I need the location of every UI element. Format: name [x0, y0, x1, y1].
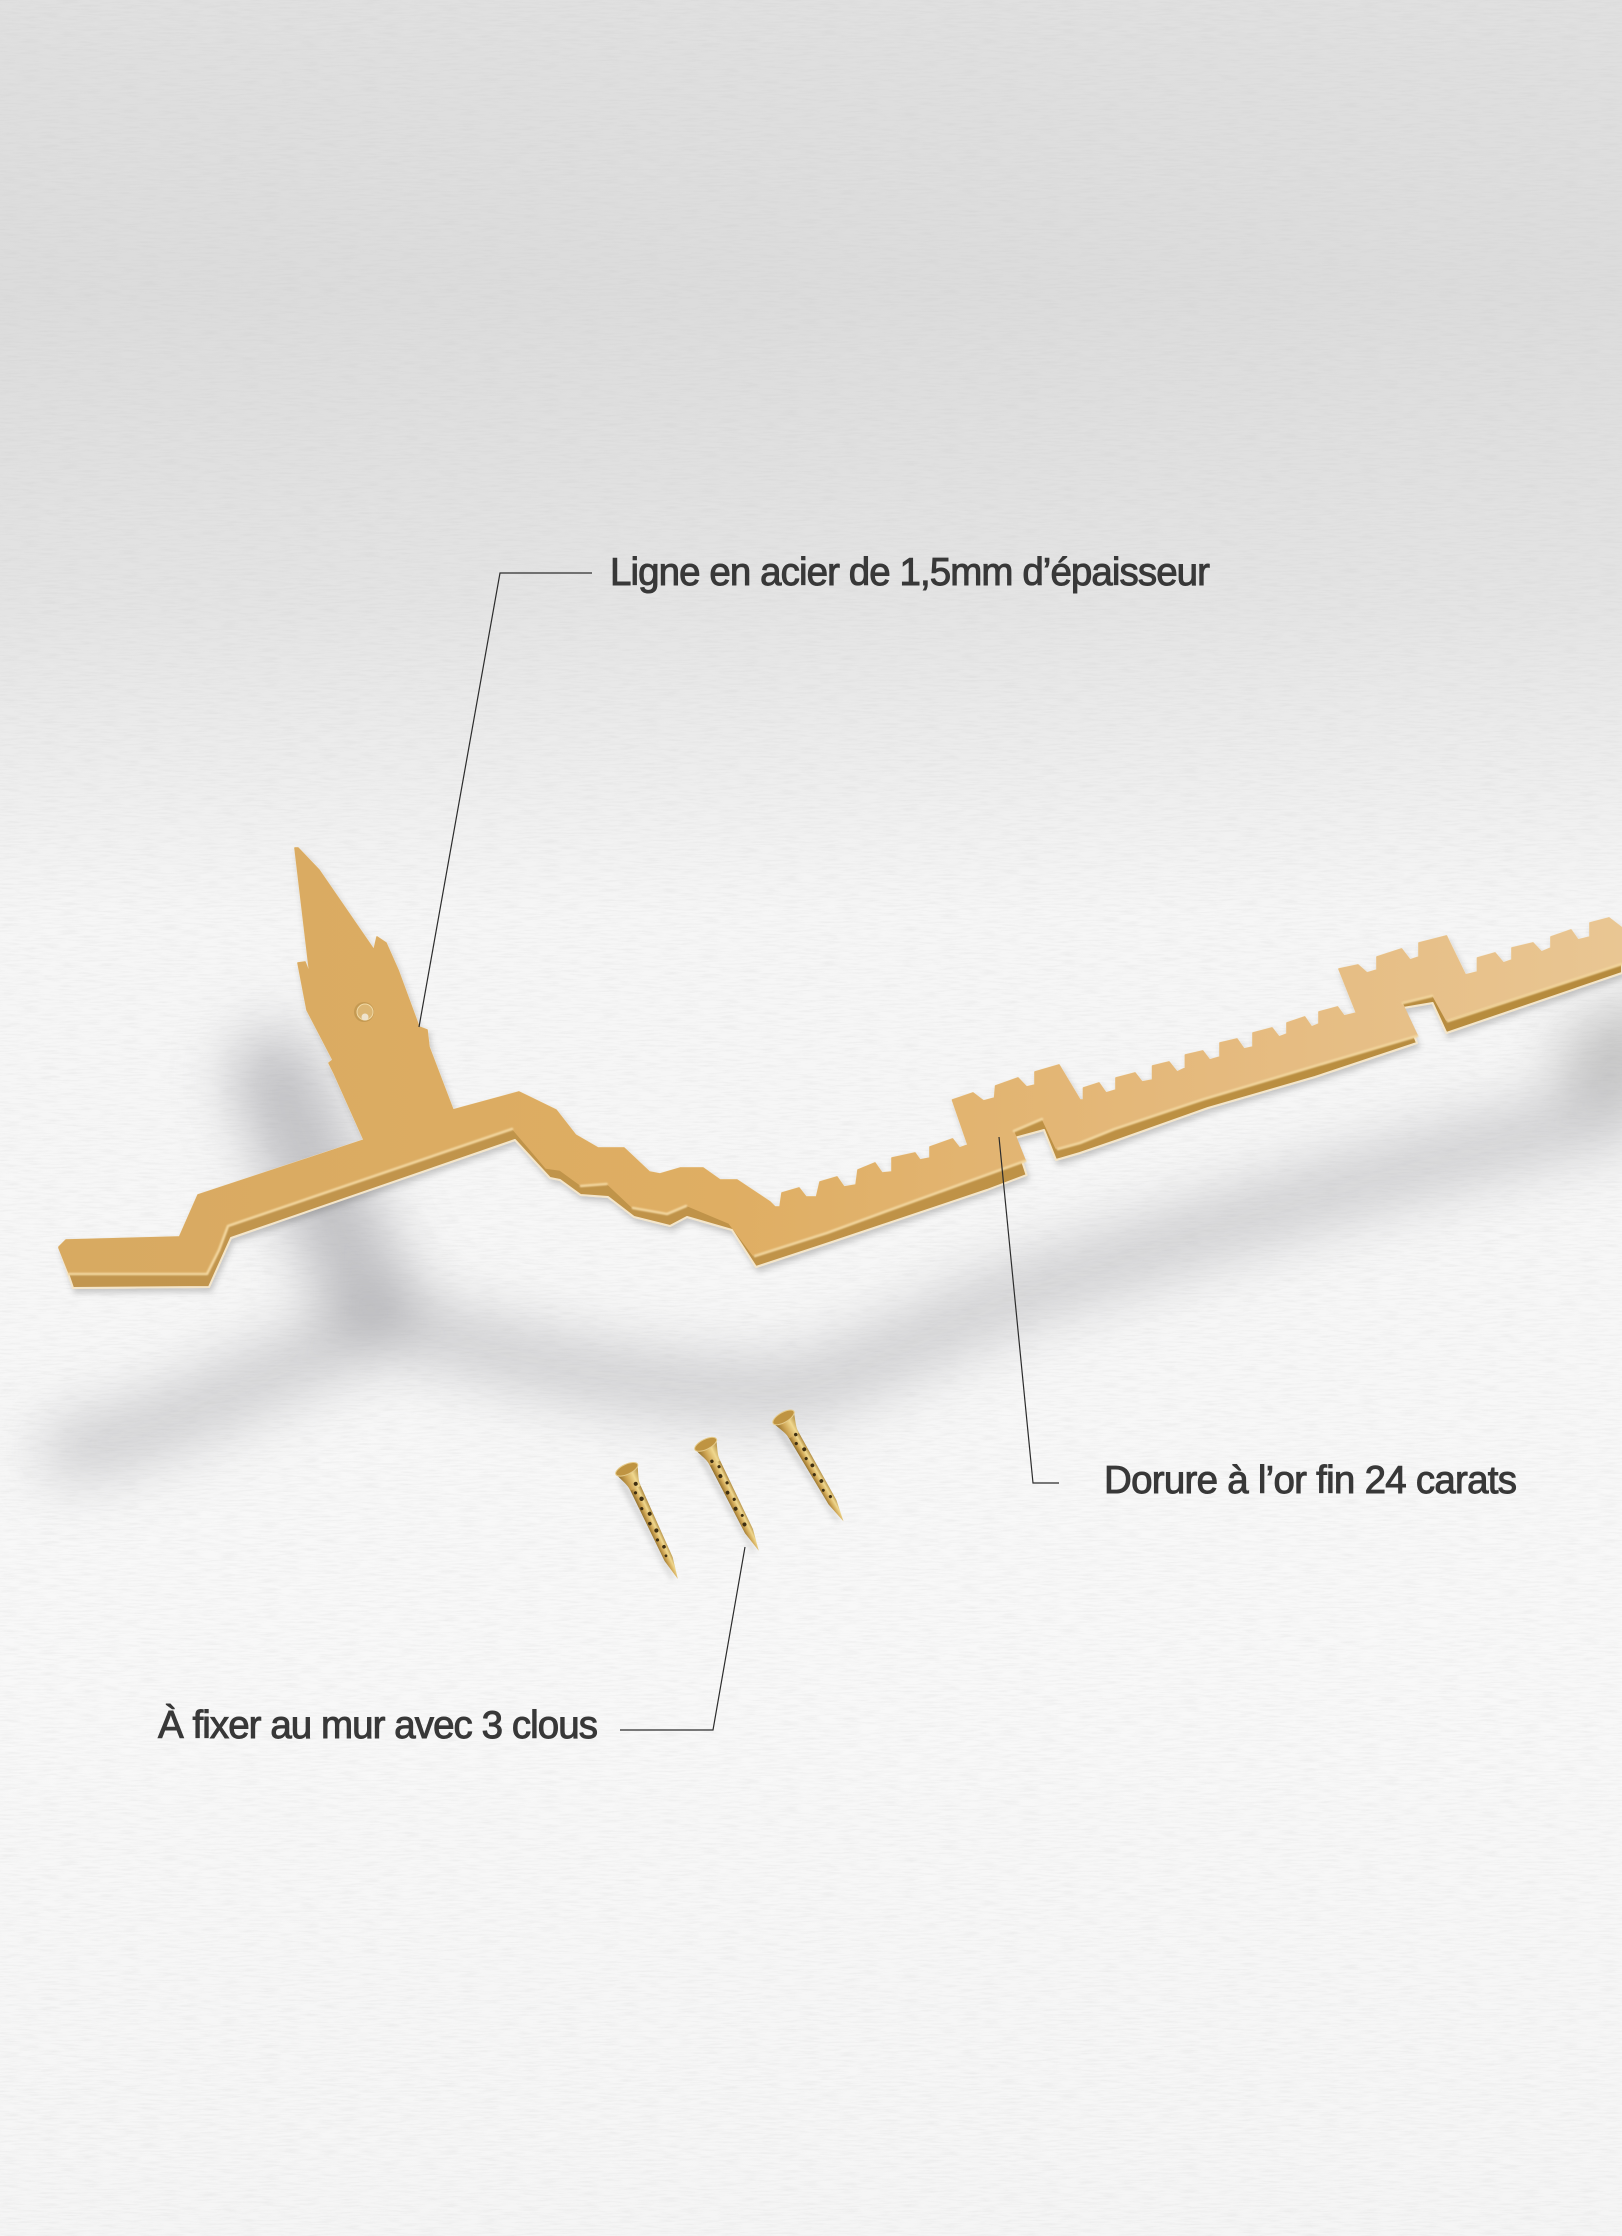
label: steel line: Ligne en acier de 1,5mm d’épaisseur: [610, 551, 1210, 594]
label: gold plating: Dorure à l’or fin 24 carats: [1104, 1459, 1517, 1502]
line thickness edge: [59, 848, 1622, 1288]
three gold nails: [614, 1407, 854, 1584]
leader line to gold surface: [999, 1137, 1059, 1483]
nail 3: [771, 1407, 854, 1527]
cast shadow of the gold line: [70, 1040, 1622, 1450]
line top surface: [59, 848, 1622, 1273]
leader line to spire: [419, 573, 592, 1027]
spire rivet: [354, 1002, 374, 1022]
gold steel line: [59, 848, 1622, 1288]
leader line to nail: [620, 1547, 745, 1730]
label: wall fixing: À fixer au mur avec 3 clous: [158, 1704, 598, 1747]
line highlight along lower edge: [69, 964, 1622, 1274]
nail 1: [614, 1460, 689, 1584]
callout: steel thickness: [419, 551, 1210, 1027]
callout: gold plating: [999, 1137, 1517, 1502]
nail 2: [693, 1434, 769, 1556]
callout: wall fixing: [158, 1547, 745, 1747]
